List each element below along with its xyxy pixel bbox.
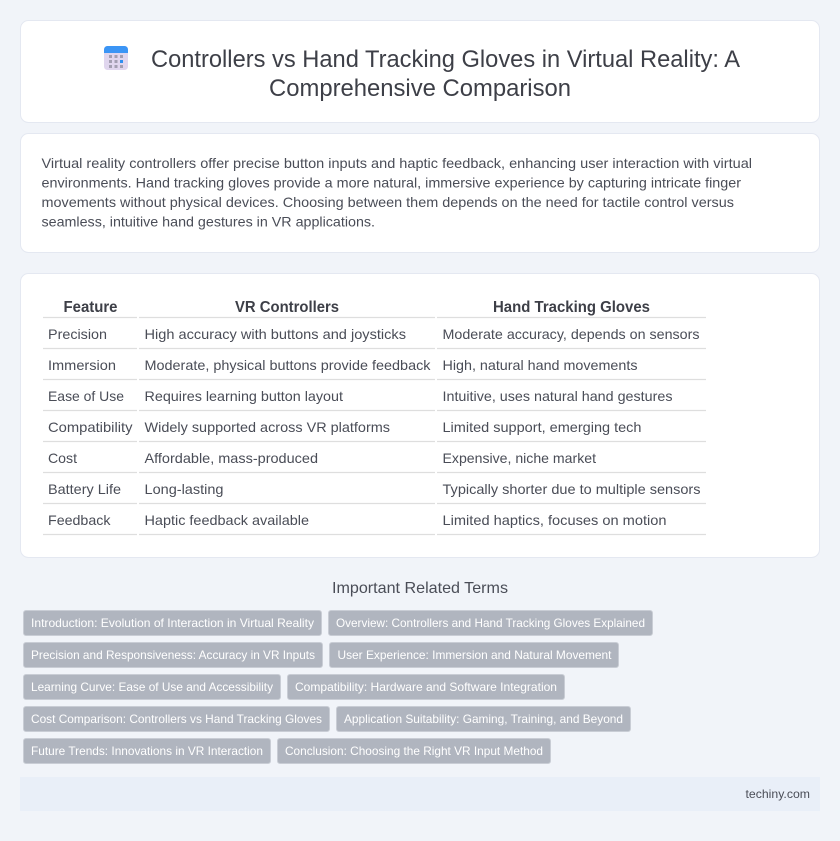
- tag: Learning Curve: Ease of Use and Accessibility: [31, 680, 273, 694]
- row: cost: Affordable, mass-produced: [144, 450, 318, 466]
- row: compatibility: [48, 419, 642, 435]
- intro paragraph: environments. Hand tracking gloves provide a more natural, immersive experience by capturing intricate finger: [42, 174, 741, 190]
- row: feedback: [48, 512, 666, 528]
- tag: User Experience: Immersion and Natural Movement: [338, 648, 612, 662]
- row: battery life: Typically shorter due to multiple sensors: [442, 481, 700, 497]
- footer bar: [20, 777, 820, 811]
- tag: [24, 610, 322, 636]
- row: compatibility: Limited support, emerging tech: [442, 419, 642, 435]
- panel: comparison table: [20, 274, 820, 558]
- row: immersion: High, natural hand movements: [442, 357, 638, 373]
- title: Comprehensive Comparison: [269, 75, 571, 102]
- intro paragraph: seamless, intuitive hand gestures in VR applications.: [42, 214, 375, 230]
- table header: VR Controllers: [235, 299, 339, 316]
- intro paragraph: [42, 155, 752, 230]
- tag: Introduction: Evolution of Interaction in Virtual Reality: [31, 616, 314, 630]
- row: immersion: Moderate, physical buttons provide feedback: [144, 357, 432, 373]
- table header: [64, 299, 650, 316]
- row: feedback: Limited haptics, focuses on motion: [442, 512, 666, 528]
- row: battery life: [48, 481, 700, 497]
- table header: Feature: [64, 299, 118, 316]
- row: cost: Cost: [48, 450, 77, 466]
- tag: [336, 706, 630, 732]
- tag: [288, 674, 564, 700]
- row: precision: High accuracy with buttons and joysticks: [144, 326, 406, 342]
- row: feedback: Haptic feedback available: [144, 512, 309, 528]
- intro paragraph: movements without physical devices. Choosing between them depends on the need for tactile control versus: [42, 194, 734, 210]
- table header: Hand Tracking Gloves: [493, 299, 650, 316]
- row: ease of use: Ease of Use: [48, 388, 124, 404]
- tag: [24, 706, 330, 732]
- tag: Future Trends: Innovations in VR Interaction: [31, 744, 263, 758]
- row: immersion: Immersion: [48, 357, 116, 373]
- row: ease of use: [48, 388, 672, 404]
- tag: Precision and Responsiveness: Accuracy in VR Inputs: [31, 648, 315, 662]
- related terms tags: [24, 610, 652, 764]
- tag: [24, 738, 270, 764]
- title: [151, 46, 740, 102]
- tag: Application Suitability: Gaming, Training, and Beyond: [344, 712, 623, 726]
- row: precision: Precision: [48, 326, 107, 342]
- row: compatibility: Widely supported across VR platforms: [144, 419, 390, 435]
- tag: [278, 738, 550, 764]
- row: cost: [48, 450, 596, 466]
- row: battery life: Battery Life: [48, 481, 121, 497]
- panel: introduction text: [20, 134, 820, 252]
- row: precision: Moderate accuracy, depends on sensors: [442, 326, 700, 342]
- row: feedback: Feedback: [48, 512, 112, 528]
- row: precision: [48, 326, 700, 342]
- row: battery life: Long-lasting: [144, 481, 224, 497]
- tag: [24, 642, 322, 668]
- tag: [24, 674, 280, 700]
- tag: Overview: Controllers and Hand Tracking Gloves Explained: [336, 616, 645, 630]
- row: immersion: [48, 357, 638, 373]
- header panel: [20, 20, 820, 122]
- row: ease of use: Intuitive, uses natural hand gestures: [442, 388, 672, 404]
- footer source text: techiny.com: [746, 787, 810, 801]
- row: cost: Expensive, niche market: [442, 450, 596, 466]
- row: compatibility: Compatibility: [48, 419, 132, 435]
- title: Controllers vs Hand Tracking Gloves in Virtual Reality: A: [151, 46, 740, 73]
- tag: [328, 610, 652, 636]
- tag: Compatibility: Hardware and Software Integration: [295, 680, 557, 694]
- intro paragraph: Virtual reality controllers offer precise button inputs and haptic feedback, enhancing user interaction with virtual: [42, 155, 752, 171]
- row: ease of use: Requires learning button layout: [144, 388, 343, 404]
- tag: [330, 642, 618, 668]
- tag: Conclusion: Choosing the Right VR Input Method: [285, 744, 543, 758]
- tag: Cost Comparison: Controllers vs Hand Tracking Gloves: [31, 712, 322, 726]
- heading: important related terms: Important Related Terms: [332, 580, 508, 597]
- icon: calendar grid: [104, 46, 128, 70]
